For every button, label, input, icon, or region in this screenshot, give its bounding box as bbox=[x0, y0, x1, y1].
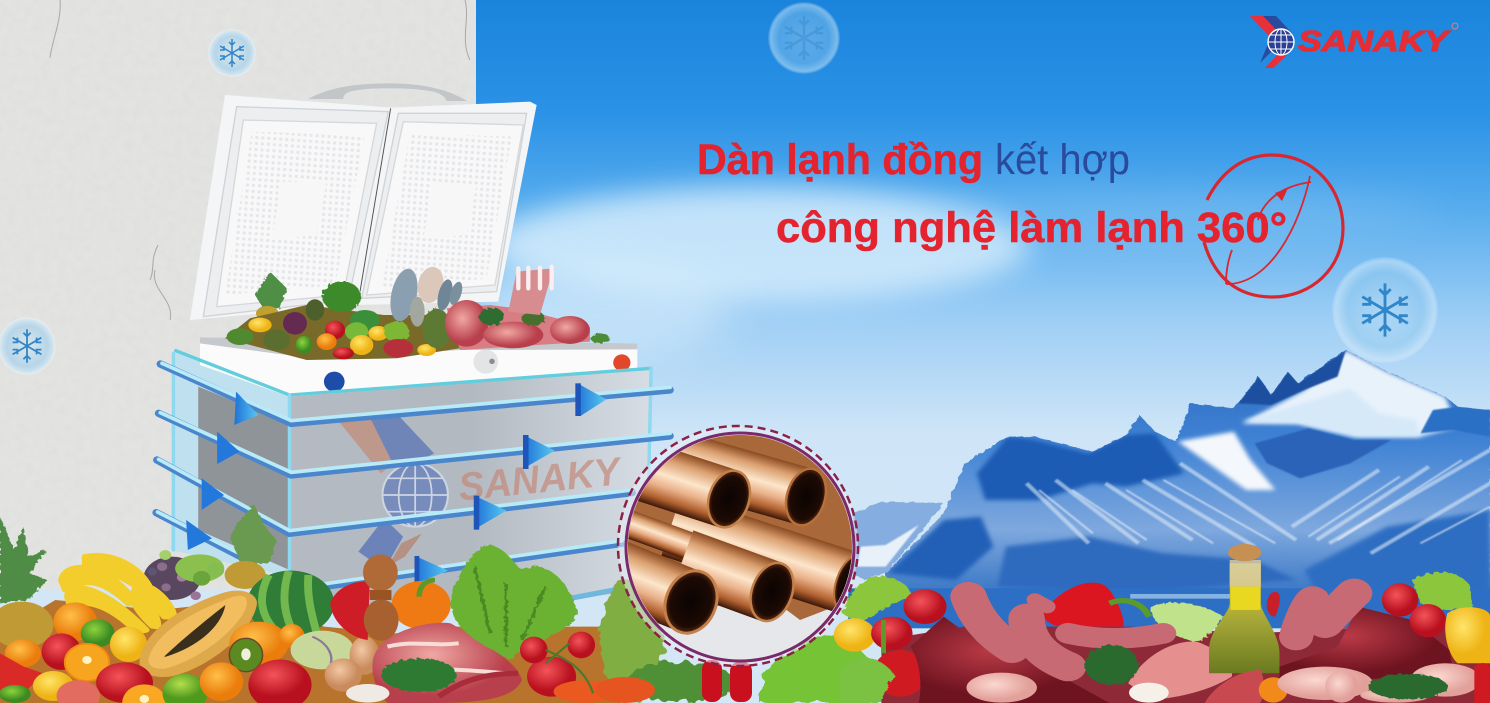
pineapple bbox=[255, 272, 287, 321]
rack of lamb bbox=[508, 267, 553, 315]
savoy cabbage bbox=[600, 578, 664, 702]
cabbage bbox=[291, 631, 354, 670]
pepper right bbox=[1267, 592, 1280, 617]
dashed ring bbox=[618, 426, 858, 666]
registered mark bbox=[1452, 23, 1458, 29]
bubble: left bbox=[0, 317, 56, 375]
heading line 2: công nghệ làm lạnh 360° bbox=[776, 204, 1287, 252]
tomatoes right bbox=[1382, 583, 1418, 617]
garlic bbox=[1129, 683, 1169, 703]
red pepper edge right bbox=[1474, 663, 1490, 703]
logo globe bbox=[1268, 29, 1294, 55]
apple red bbox=[42, 633, 81, 670]
logo wordmark: SANAKY bbox=[1298, 26, 1451, 58]
chili right bbox=[730, 662, 752, 702]
dark meat left bbox=[910, 617, 1109, 703]
beef bbox=[372, 623, 522, 703]
tomato bbox=[595, 677, 655, 703]
bubble: top centre bbox=[768, 2, 840, 74]
watermark: SANAKY bbox=[456, 450, 625, 509]
flow arrows side bbox=[186, 392, 258, 550]
grapes purple bbox=[144, 557, 201, 600]
background: concrete wall bbox=[0, 0, 476, 590]
red pepper left bbox=[873, 620, 927, 697]
bananas bbox=[61, 556, 174, 632]
tube layer 1 bbox=[160, 363, 670, 423]
pineapple back bbox=[225, 503, 277, 589]
yellow apple bbox=[110, 627, 147, 662]
pipe top left bbox=[638, 452, 752, 529]
food in freezer bbox=[225, 264, 609, 360]
pepper mill bbox=[363, 554, 399, 641]
far mountain bbox=[852, 502, 944, 580]
right lid bbox=[353, 102, 537, 305]
flow arrows front bbox=[414, 383, 606, 584]
pomegranate bbox=[248, 660, 312, 703]
tube layer 2 bbox=[159, 413, 670, 475]
parsley bbox=[1085, 645, 1139, 685]
logo: Sanaky bbox=[1250, 16, 1458, 68]
sausages left bbox=[969, 597, 1163, 667]
lettuce back left bbox=[842, 576, 911, 623]
hinge bbox=[473, 350, 498, 374]
yellow pepper right bbox=[1445, 607, 1490, 663]
sausages right bbox=[1296, 593, 1354, 637]
red pepper bbox=[330, 581, 370, 640]
small pipe bbox=[628, 511, 693, 558]
grapes green bbox=[159, 550, 224, 586]
logo chevrons bbox=[1250, 16, 1292, 68]
food centre bottom bbox=[595, 578, 910, 703]
heading bbox=[697, 136, 1287, 252]
garlic bbox=[346, 684, 389, 703]
red pepper centre bbox=[1043, 583, 1149, 627]
parsley bbox=[382, 658, 457, 692]
copper pipes bbox=[628, 435, 852, 635]
food pile right bbox=[834, 544, 1490, 703]
freezer body with cooling tubes bbox=[156, 337, 670, 610]
front face bbox=[289, 368, 651, 610]
tube layer 3 bbox=[157, 459, 632, 533]
glass left side bbox=[171, 350, 289, 577]
citrus half bbox=[65, 644, 109, 681]
pink apple bbox=[96, 662, 153, 703]
pipe lower left bbox=[628, 542, 719, 635]
pipe centre bbox=[681, 530, 794, 622]
badge blue bbox=[324, 372, 345, 392]
dark meat right bbox=[1279, 607, 1454, 680]
watermark bbox=[338, 415, 625, 570]
main range bbox=[886, 350, 1490, 607]
bubble: top left bbox=[208, 29, 256, 77]
lime bottom bbox=[0, 685, 31, 703]
freezer lid bbox=[190, 83, 537, 320]
pipe top right bbox=[648, 439, 827, 526]
food base bbox=[225, 305, 460, 360]
lettuce back right bbox=[1412, 572, 1472, 610]
lid handle bbox=[308, 83, 467, 101]
chicken bottom right bbox=[1277, 663, 1481, 703]
lettuce bottom left bbox=[840, 658, 896, 703]
citrus half bottom bbox=[122, 684, 166, 703]
pile base bbox=[0, 600, 620, 703]
pork slice bbox=[1128, 642, 1232, 700]
lettuce bbox=[451, 545, 577, 660]
orange back bbox=[229, 622, 289, 665]
papaya bbox=[140, 591, 257, 677]
parsley right bbox=[1369, 674, 1447, 699]
lake bbox=[848, 588, 1490, 628]
pipe far right bbox=[662, 513, 852, 611]
mountains bbox=[848, 350, 1490, 628]
kiwi bbox=[229, 638, 263, 672]
bubble: right bbox=[1332, 257, 1438, 363]
heading: kết hợp bbox=[995, 136, 1130, 184]
lime bbox=[81, 619, 115, 647]
meat bottom centre bbox=[1205, 670, 1264, 703]
herb leaves bbox=[625, 662, 735, 702]
tomatoes bbox=[520, 632, 617, 703]
pineapple left bbox=[0, 517, 53, 648]
apple bottom bbox=[57, 680, 100, 703]
heading line 1: Dàn lạnh đồng bbox=[697, 136, 983, 184]
peach left bbox=[5, 639, 41, 667]
tube layer 4 bbox=[156, 512, 632, 598]
food pile left bbox=[0, 503, 620, 703]
tomato stems bbox=[903, 589, 947, 624]
watermelon slice bbox=[0, 653, 43, 693]
badge red bbox=[613, 354, 630, 371]
chicken bottom left bbox=[966, 673, 1037, 703]
inner disc bbox=[626, 433, 854, 661]
icon: 360 degree arc bbox=[1204, 155, 1343, 297]
orange pepper bbox=[391, 580, 451, 629]
tangerine small bbox=[279, 624, 304, 648]
green apple bbox=[163, 674, 208, 703]
meat bbox=[445, 300, 609, 348]
yellow fruit bbox=[33, 671, 74, 701]
lettuce back centre bbox=[1151, 603, 1224, 642]
fish bbox=[386, 264, 465, 327]
green salad bbox=[760, 636, 910, 703]
orange bottom bbox=[200, 662, 243, 701]
orange round bbox=[53, 602, 97, 641]
watermelon bbox=[247, 571, 334, 636]
left lid bbox=[190, 95, 392, 320]
yellow pepper left bbox=[834, 618, 875, 652]
glass frame bbox=[173, 351, 651, 577]
chili left bbox=[702, 660, 722, 702]
oil bottle bbox=[1209, 544, 1279, 673]
copper tubes inset bbox=[616, 424, 860, 668]
vegetables and fruit bbox=[227, 281, 451, 359]
eggs bbox=[325, 636, 380, 692]
pile base bbox=[881, 627, 1490, 703]
carrot bbox=[1259, 677, 1288, 703]
